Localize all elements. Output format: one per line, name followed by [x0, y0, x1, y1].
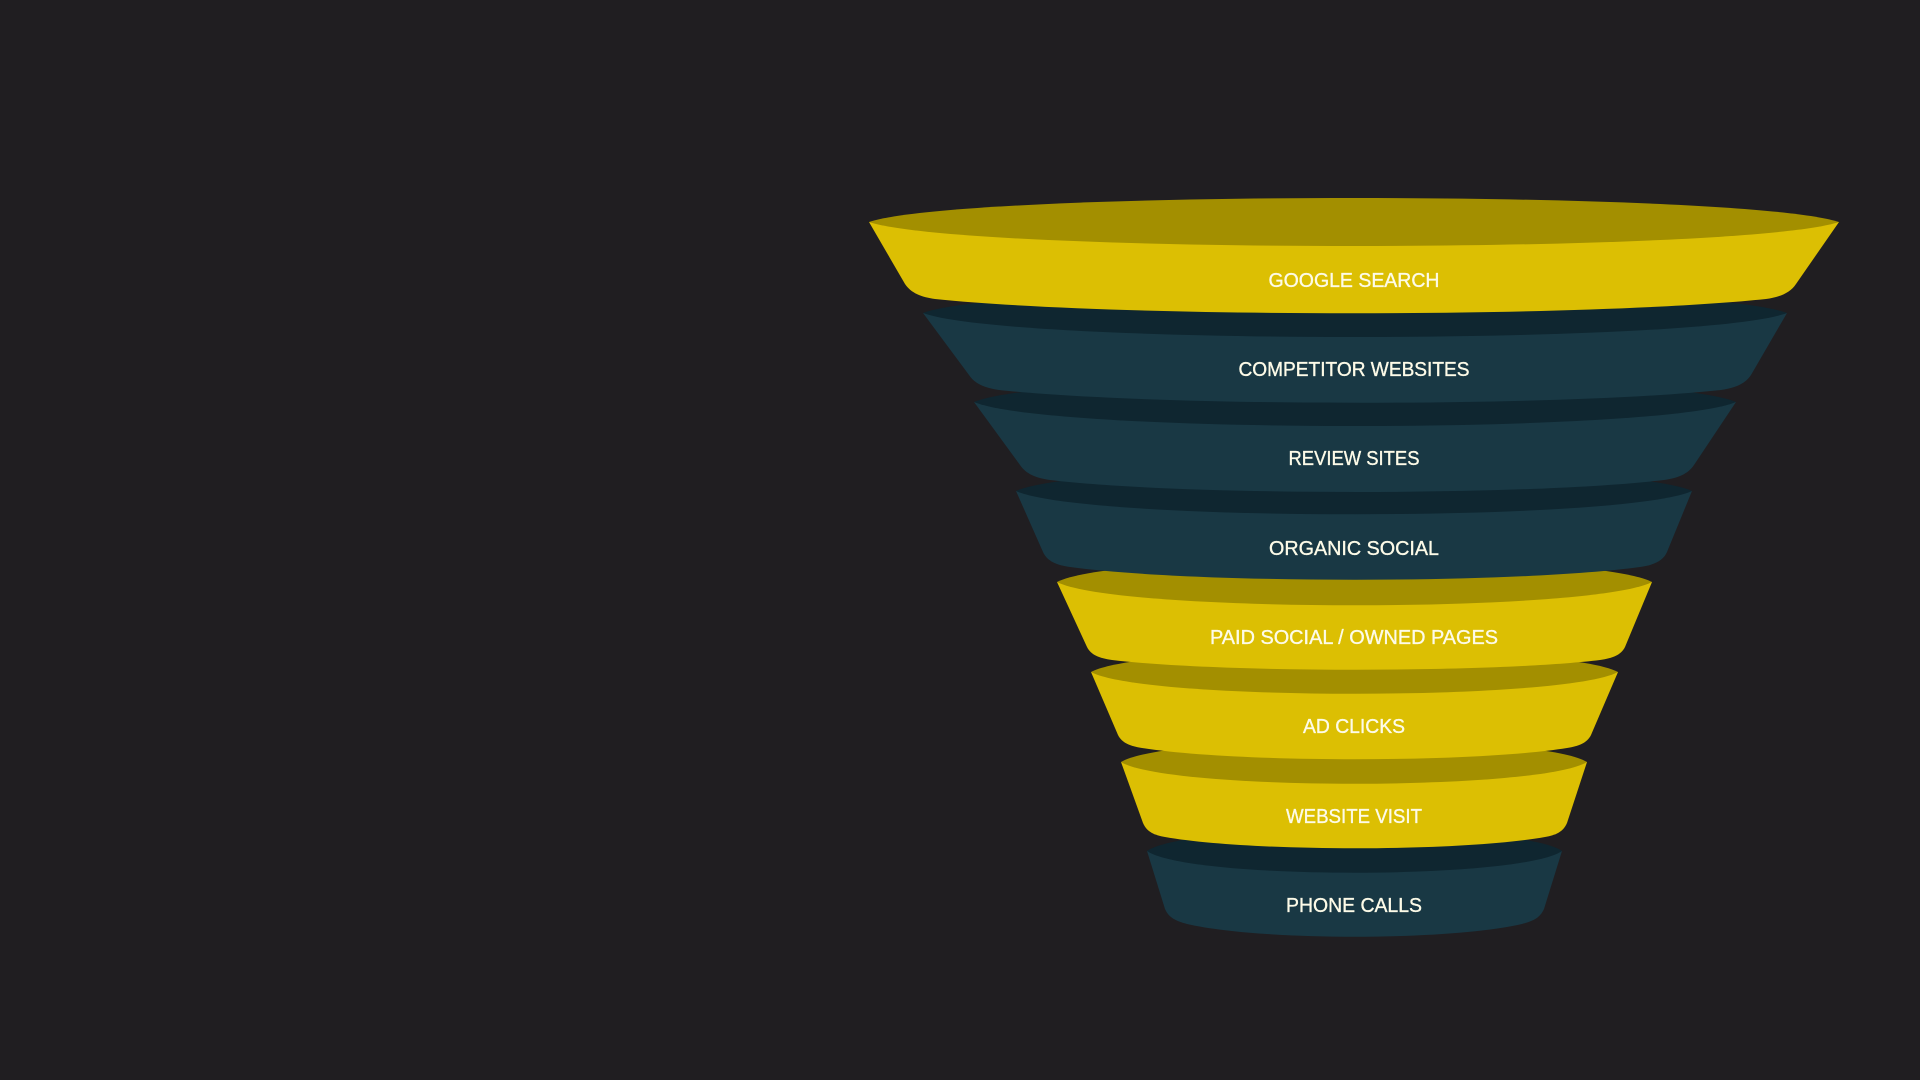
funnel layer: ad clicks [1091, 650, 1618, 759]
funnel layer: phone calls: PHONE CALLS [1286, 895, 1422, 917]
funnel layer: review sites [974, 378, 1736, 492]
funnel layer: competitor websites [923, 289, 1787, 403]
funnel layer: organic social [1016, 468, 1692, 580]
funnel layer: competitor websites: COMPETITOR WEBSITES [1238, 359, 1470, 381]
funnel layer: ad clicks: AD CLICKS [1303, 716, 1405, 738]
funnel layer: google search [869, 198, 1839, 313]
funnel layer: review sites: REVIEW SITES [1288, 448, 1420, 470]
funnel layer: organic social: ORGANIC SOCIAL [1269, 538, 1439, 560]
funnel layer: google search: GOOGLE SEARCH [1268, 270, 1440, 292]
funnel layer: phone calls [1147, 829, 1562, 937]
funnel layer: paid social / owned pages: PAID SOCIAL / OWNED PAGES [1210, 627, 1498, 649]
funnel layer: website visit: WEBSITE VISIT [1286, 806, 1422, 828]
funnel layer: website visit [1121, 740, 1587, 848]
funnel layer: paid social / owned pages [1057, 559, 1652, 670]
